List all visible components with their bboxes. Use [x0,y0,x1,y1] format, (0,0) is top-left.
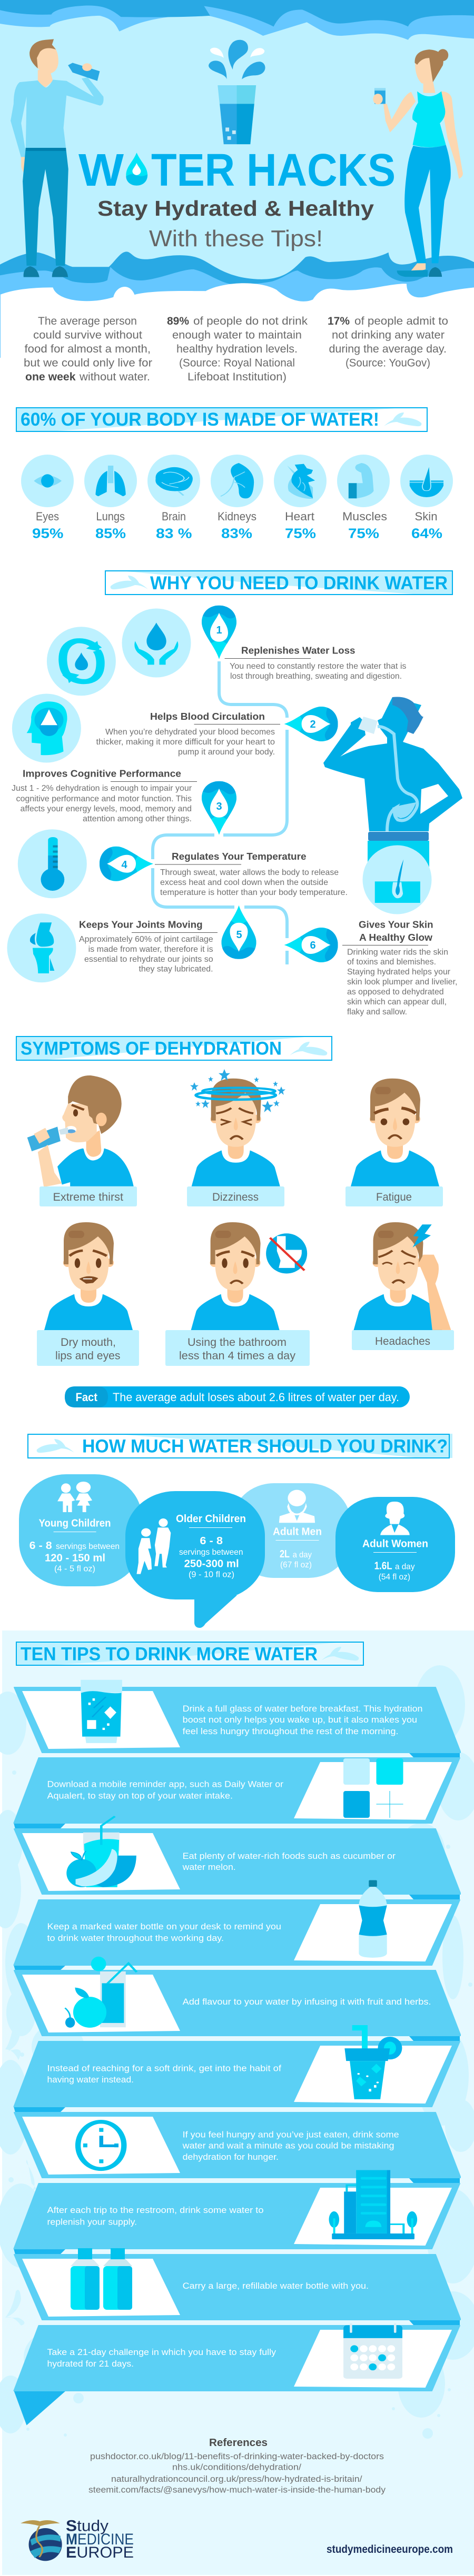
step 5: text: is made from water, therefore it is [88,945,213,954]
references [88,2437,386,2495]
step 3: text: Just 1 - 2% dehydration is enough to impair your [12,784,192,793]
icon: bottle [359,1880,387,1958]
stat: 89 percent: healthy hydration levels. [176,343,298,355]
panel: adult men: a day [293,1551,312,1559]
tip 1: glass of water: Drink a full glass of water before breakfast. This hydration [183,1704,422,1714]
panel: young children: 120 - 150 ml [45,1553,105,1564]
title: water hacks: W [78,145,124,196]
step 2: text: Helps Blood Circulation [150,711,265,722]
tip 6: swap soft drink [14,2025,460,2107]
panel: young children: 6 - 8 [29,1540,52,1552]
tip 10: 21-day challenge: hydrated for 21 days. [47,2359,134,2369]
heading: how much water should you drink: HOW MUCH WATER SHOULD YOU DRINK? [82,1436,448,1457]
tip 8: after restroom: replenish your supply. [47,2217,137,2227]
icon circle: head with brain [12,693,81,763]
step 3: text: cognitive performance and motor function. This [16,794,192,803]
symptom: fatigue: Fatigue [376,1191,412,1203]
step 4: text: temperature is hotter than your body temperature. [160,888,348,897]
references: naturalhydrationcouncil.org.uk/press/how-hydrated-is-britain/ [111,2474,362,2484]
organ: lungs [84,455,137,541]
icon: clock [78,2122,124,2169]
panel: adult men [232,1483,351,1578]
panel: adult women: (54 fl oz) [379,1573,410,1582]
icon: adult man [279,1490,315,1523]
panel: older children: 6 - 8 [200,1535,223,1547]
title water drop [126,153,147,186]
step 2: text [96,711,280,757]
tip 8: after restroom: After each trip to the restroom, drink some water to [47,2205,263,2215]
heading: symptoms of dehydration: SYMPTOMS OF DEHYDRATION [21,1039,282,1059]
step 5: text: they stay lubricated. [139,965,213,974]
panel: adult men: Adult Men [273,1526,322,1538]
step 1: text [224,646,407,681]
step 3: pin: 3 [216,801,222,812]
symptom: using the bathroom: less than 4 times a day [179,1350,296,1362]
stat: 17 percent: during the average day. [329,343,447,355]
tip 4: marked bottle: Keep a marked water bottle on your desk to remind you [47,1921,281,1931]
tip 10: 21-day challenge [14,2323,460,2391]
stat: 89 percent: of people do not drink [193,315,308,327]
organ: brain [147,455,200,541]
left border sliver [0,295,1,358]
tip 4: marked bottle [14,1880,460,1965]
step 3: text: Improves Cognitive Performance [23,769,181,779]
step 1: pin: 1 [216,625,222,636]
tip 2: reminder app: Download a mobile reminder app, such as Daily Water or [47,1779,283,1789]
organ: brain: Brain [162,510,186,523]
stat: 17 percent: (Source: YouGov) [345,357,430,369]
step 1: text: lost through breathing, sweating and digestion. [230,672,402,681]
step 4: text: Through sweat, water allows the body to release [160,868,339,877]
icon: glass with fruit [65,1957,136,2028]
panel: older children: servings between [179,1548,243,1557]
step 6: pin [284,927,339,963]
icon: no toilet [266,1233,307,1273]
step 4: text: Regulates Your Temperature [172,851,307,862]
panel: young children: Young Children [39,1518,111,1530]
illustration: glass with splash [209,40,265,144]
step 6: text: Staying hydrated helps your [347,968,451,977]
step 6: text: as opposed to dehydrated [347,988,444,997]
tip 7: wait a minute: dehydration for hunger. [183,2152,279,2162]
organ: lungs: 85% [95,526,126,541]
step 5: text [79,920,218,974]
stat: survive without water: one week [25,371,76,383]
panel: adult men: 2L [280,1548,290,1560]
step 3: text [12,769,197,823]
icon: adult woman [380,1502,410,1535]
organ: muscles: Muscles [342,510,387,523]
step 2: text: thicker, making it more difficult for your heart to [96,738,275,747]
tip 3: water rich foods: Eat plenty of water-rich foods such as cucumber or [183,1851,396,1861]
top water waves [0,0,474,40]
tip 6: swap soft drink: having water instead. [47,2075,134,2085]
symptom: dizziness: Dizziness [212,1191,259,1203]
logo: study medicine europe: EUROPE [66,2544,134,2561]
tip 7: wait a minute [14,2112,460,2178]
panel: older children: (9 - 10 fl oz) [189,1571,234,1579]
icon circle: thermometer [18,829,87,898]
step 1: text: Replenishes Water Loss [241,646,355,656]
stat: survive without water: food for almost a month, [24,343,151,355]
step 6: text: flaky and sallow. [347,1008,407,1017]
organ: kidneys: Kidneys [218,510,256,523]
step 6: text: Gives Your Skin [359,920,433,930]
step 5: text: Keeps Your Joints Moving [79,920,203,930]
stat: 89 percent: enough water to maintain [172,329,302,341]
icon circle: hands holding drop [122,608,191,678]
organ: heart: 75% [285,526,316,541]
step 1: text: You need to constantly restore the water that is [230,662,407,671]
bottom water waves [0,251,474,379]
step 3: text: affects your energy levels, mood, memory and [20,804,192,813]
step 4: text: excess heat and cool down when the outside [160,878,328,887]
step 5: text: essential to rehydrate our joints so [84,955,213,964]
organ: lungs: Lungs [96,510,125,523]
symptom: dry mouth: lips and eyes [55,1350,120,1362]
stat: 89 percent: (Source: Royal National [179,357,295,369]
panel: adult men: (67 fl oz) [280,1561,312,1569]
stat: 17 percent: 17% [328,315,350,327]
step 5: pin [221,905,257,960]
panel: older children: 250-300 ml [184,1558,239,1570]
step 2: text: pump it around your body. [178,748,275,757]
tip 7: wait a minute: If you feel hungry and you’ve just eaten, drink some [183,2129,399,2139]
step 4: text [155,851,348,897]
organ: muscles: 75% [348,526,379,541]
icon: older children [136,1518,171,1574]
organ: eyes: 95% [32,526,63,541]
icon circle: knee joint [7,913,76,982]
step 1: pin [201,605,237,660]
icon: app grid [343,1758,403,1818]
title: water hacks: TER HACKS [151,145,396,196]
stat: 89 percent: Lifeboat Institution) [187,371,287,383]
symptom: using the bathroom [165,1222,310,1366]
panel: body organ water percentages [21,455,453,541]
heading: ten tips: TEN TIPS TO DRINK MORE WATER [21,1644,318,1665]
stat: survive without water: The average person [38,315,137,327]
step 3: text: attention among other things. [83,814,192,823]
organ: skin: 64% [411,526,442,541]
panel: young children: (4 - 5 fl oz) [54,1565,95,1574]
references: nhs.uk/conditions/dehydration/ [172,2462,301,2472]
tip 7: wait a minute: water and wait a minute as you could be mistaking [182,2141,394,2151]
subtitle line two: With these Tips! [149,226,323,251]
panel: adult women: a day [395,1563,415,1572]
stat: 89 percent: 89% [167,315,189,327]
tip 5: infused water [14,1957,460,2036]
organ: skin: Skin [415,510,437,523]
stat: survive without water: without water. [79,371,150,383]
step 3: pin [201,781,237,836]
fact pill [65,1386,410,1407]
tip 8: after restroom [14,2170,460,2249]
organ: kidneys [211,455,263,541]
logo: study medicine europe [21,2517,134,2561]
organ: brain: 83 % [156,526,192,541]
tip 2: reminder app [14,1758,460,1823]
step 6: pin: 6 [310,940,316,951]
logo mark [21,2520,62,2561]
step 4: pin: 4 [121,859,127,871]
fact pill: The average adult loses about 2.6 litres of water per day. [113,1391,399,1404]
organ: skin [400,455,453,541]
tip 10: 21-day challenge: Take a 21-day challenge in which you have to stay fully [47,2347,276,2357]
tip 5: infused water: Add flavour to your water by infusing it with fruit and herbs. [183,1997,431,2007]
symptom: dry mouth: Dry mouth, [61,1336,116,1349]
symptom: dry mouth [37,1222,139,1366]
symptom: extreme thirst [27,1075,137,1206]
tip 1: glass of water: boost not only helps you wake up, but it also makes you [183,1715,417,1725]
stat: survive without water: but we could only live for [24,357,152,369]
symptom: headaches: Headaches [375,1335,430,1347]
panel: older children: Older Children [176,1513,246,1525]
organ: muscles [337,455,390,541]
organ: eyes: Eyes [36,510,59,523]
illustration: drinking man anatomy [323,697,462,867]
icon circle: recycle drop [47,627,116,696]
flow connector line [153,661,287,964]
illustration: woman with glass [373,49,463,277]
references: steemit.com/facts/@sanevys/how-much-water-is-inside-the-human-body [88,2485,386,2495]
symptom: fatigue [345,1079,443,1206]
tip 3: water rich foods: water melon. [182,1862,236,1872]
tip 3: water rich foods [14,1816,460,1894]
icon: two bottles [71,2248,132,2310]
logo: study medicine europe: MEDICINE [66,2531,134,2548]
step 6: text: of toxins and blemishes. [347,958,436,967]
subtitle: Stay Hydrated & Healthy [97,196,374,220]
tip 9: refillable bottle: Carry a large, refillable water bottle with you. [183,2281,369,2291]
panel: older children [125,1491,265,1628]
symptom: using the bathroom: Using the bathroom [187,1336,287,1349]
symptom: headaches [352,1222,454,1350]
step 6: text: A Healthy Glow [359,932,433,943]
ribbon fold shadows [14,1753,460,2426]
panel: adult women: Adult Women [362,1538,428,1550]
stat: 89 percent [167,315,308,383]
tip 4: marked bottle: to drink water throughout the working day. [47,1933,224,1943]
icon: glass [81,1680,122,1743]
stat: 17 percent [328,315,448,369]
step 4: pin [99,846,154,882]
header: water hacks hero [0,0,474,379]
logo: study medicine europe: Study [66,2517,108,2534]
website url: studymedicineeurope.com [327,2543,453,2555]
tip 2: reminder app: Aqualert, to stay on top of your water intake. [47,1791,233,1800]
heading: why you need to drink water: WHY YOU NEED TO DRINK WATER [150,573,448,593]
step 2: pin: 2 [310,719,316,730]
panel: young children: servings between [56,1542,120,1551]
organ: heart: Heart [285,510,314,523]
tips section background [0,1631,474,2575]
fact pill: Fact [76,1391,98,1404]
stat: 17 percent: not drinking any water [332,329,445,341]
tip 9: refillable bottle [14,2248,460,2320]
tip 6: swap soft drink: Instead of reaching for a soft drink, get into the habit of [47,2064,281,2074]
organ: eyes [21,455,74,541]
organ: kidneys: 83% [221,526,252,541]
symptom: dizziness [187,1069,285,1206]
illustration: man drinking [11,39,104,277]
stat: 17 percent: of people admit to [354,315,448,327]
step 5: text: Approximately 60% of joint cartilage [79,935,213,944]
panel: young children [19,1474,142,1586]
stat: survive without water [24,315,152,383]
organ: heart [274,455,327,541]
icon: drink, apple and melon [66,1816,136,1887]
step 6: text [342,920,457,1017]
panel: adult women [335,1497,455,1592]
step 2: text: When you’re dehydrated your blood becomes [105,728,275,737]
symptom: extreme thirst: Extreme thirst [53,1191,123,1203]
tip 1: glass of water: feel less hungry throughout the rest of the morning. [183,1726,398,1736]
icon: young children [57,1482,92,1512]
icon: calendar [343,2323,402,2379]
icon: cup [344,2025,402,2099]
step 6: text: Drinking water rids the skin [347,948,448,957]
step 6: text: skin which can appear dull, [347,998,447,1007]
icon circle: skin follicle [362,845,432,914]
panel: adult women: 1.6L [374,1561,392,1572]
tip 1: glass of water [14,1680,460,1753]
step 6: text: skin look plumper and livelier, [347,978,457,987]
icon: lightning [413,1224,432,1247]
stat: survive without water: could survive without [33,329,142,341]
references: pushdoctor.co.uk/blog/11-benefits-of-drinking-water-backed-by-doctors [90,2451,384,2461]
step 5: pin: 5 [236,929,242,941]
heading: 60 percent of body: 60% OF YOUR BODY IS MADE OF WATER! [21,409,379,430]
icon: building [329,2170,417,2239]
step 2: pin [284,706,339,742]
references: References [209,2437,268,2449]
